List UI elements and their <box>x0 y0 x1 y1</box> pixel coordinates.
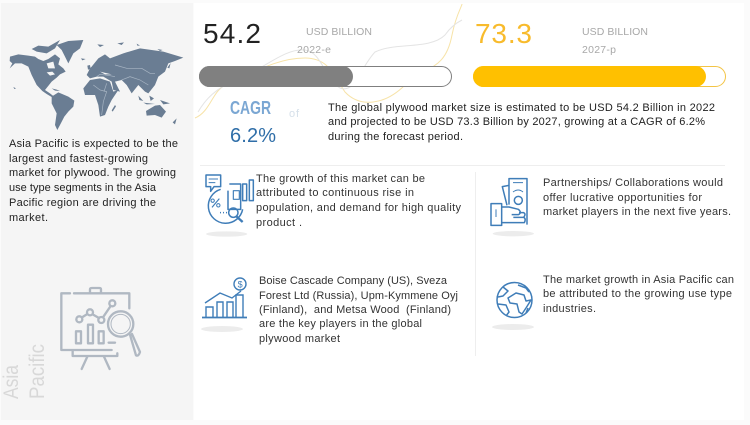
stat: 2022 value <box>203 18 372 56</box>
stat: 2022 value: USD BILLION <box>306 26 372 38</box>
text: regional growth: The market growth in Asia Pacific can <box>543 274 734 286</box>
icon: analytics chart <box>206 175 253 237</box>
text: market description <box>328 102 715 143</box>
icon: bars with dollar <box>201 278 247 332</box>
bar: 2022 progress <box>199 66 452 87</box>
text: growth drivers: product . <box>256 217 302 229</box>
text: key players: Forest Ltd (Russia), Upm-Kymmene Oyj <box>259 290 458 302</box>
label: Asia Pacific vertical text <box>0 344 49 399</box>
stat: CAGR: 6.2% <box>230 125 276 147</box>
decorative curves <box>195 4 462 118</box>
icon: bars with dollar: $ <box>238 280 243 290</box>
block: growth drivers <box>206 173 462 237</box>
text: market description: and projected to be USD 73.3 Billion by 2027, growing at a CAGR of 6.2% <box>328 116 705 128</box>
icon: globe <box>492 282 534 330</box>
panel: main content <box>194 3 744 420</box>
bar: 2027 progress <box>473 66 726 87</box>
text: regional summary: Pacific region are driving the <box>9 197 156 209</box>
text: key players: plywood market <box>259 333 340 345</box>
text: regional growth <box>543 274 734 315</box>
stat: 2027 value: 73.3 <box>475 18 532 49</box>
stat: CAGR: CAGR <box>230 98 271 118</box>
text: key players: are the key players in the global <box>259 318 422 330</box>
text: opportunities: Partnerships/ Collaborations would <box>543 177 723 189</box>
stat: 2027 value: USD BILLION <box>582 26 648 38</box>
text: market description: The global plywood market size is estimated to be USD 54.2 Billion in 2022 <box>328 102 715 114</box>
text: key players: (Finland), and Metsa Wood (Finland) <box>259 304 451 316</box>
text: growth drivers: attributed to continuous rise in <box>256 187 414 199</box>
text: growth drivers: population, and demand for high quality <box>256 202 462 214</box>
text: regional summary: use type segments in the Asia <box>9 182 157 194</box>
text: opportunities: offer lucrative opportunities for <box>543 192 702 204</box>
text: market description: during the forecast period. <box>328 131 463 143</box>
block: key players <box>201 275 458 345</box>
text: growth drivers <box>256 173 462 229</box>
label: Asia Pacific vertical text: Pacific <box>26 344 49 399</box>
stat: 2027 value <box>475 18 648 56</box>
block: opportunities <box>491 177 731 236</box>
block: regional growth <box>492 274 734 330</box>
stat: 2027 value: 2027-p <box>582 44 616 56</box>
icon: hand with money <box>491 179 534 236</box>
label: Asia Pacific vertical text: Asia <box>0 365 23 399</box>
icon: world map <box>10 40 183 130</box>
text: opportunities: market players in the next five years. <box>543 206 731 218</box>
stat: CAGR <box>230 98 300 147</box>
text: regional summary: largest and fastest-growing <box>9 153 148 165</box>
stat: 2022 value: 2022-e <box>297 44 331 56</box>
text: regional growth: be attributed to the growing use type <box>543 288 732 300</box>
stat: CAGR: of <box>289 108 300 120</box>
text: growth drivers: The growth of this market can be <box>256 173 425 185</box>
text: regional growth: industries. <box>543 303 596 315</box>
text: key players <box>259 275 458 345</box>
text: key players: Boise Cascade Company (US), Sveza <box>259 275 448 287</box>
text: regional summary <box>9 138 178 224</box>
text: regional summary: market. <box>9 212 48 224</box>
panel: left sidebar <box>0 3 193 420</box>
stat: 2022 value: 54.2 <box>203 18 261 49</box>
text: regional summary: Asia Pacific is expected to be the <box>9 138 178 150</box>
text: regional summary: market for plywood. The growing <box>9 167 176 179</box>
icon: presentation board with magnifier <box>61 288 140 369</box>
text: opportunities <box>543 177 731 218</box>
